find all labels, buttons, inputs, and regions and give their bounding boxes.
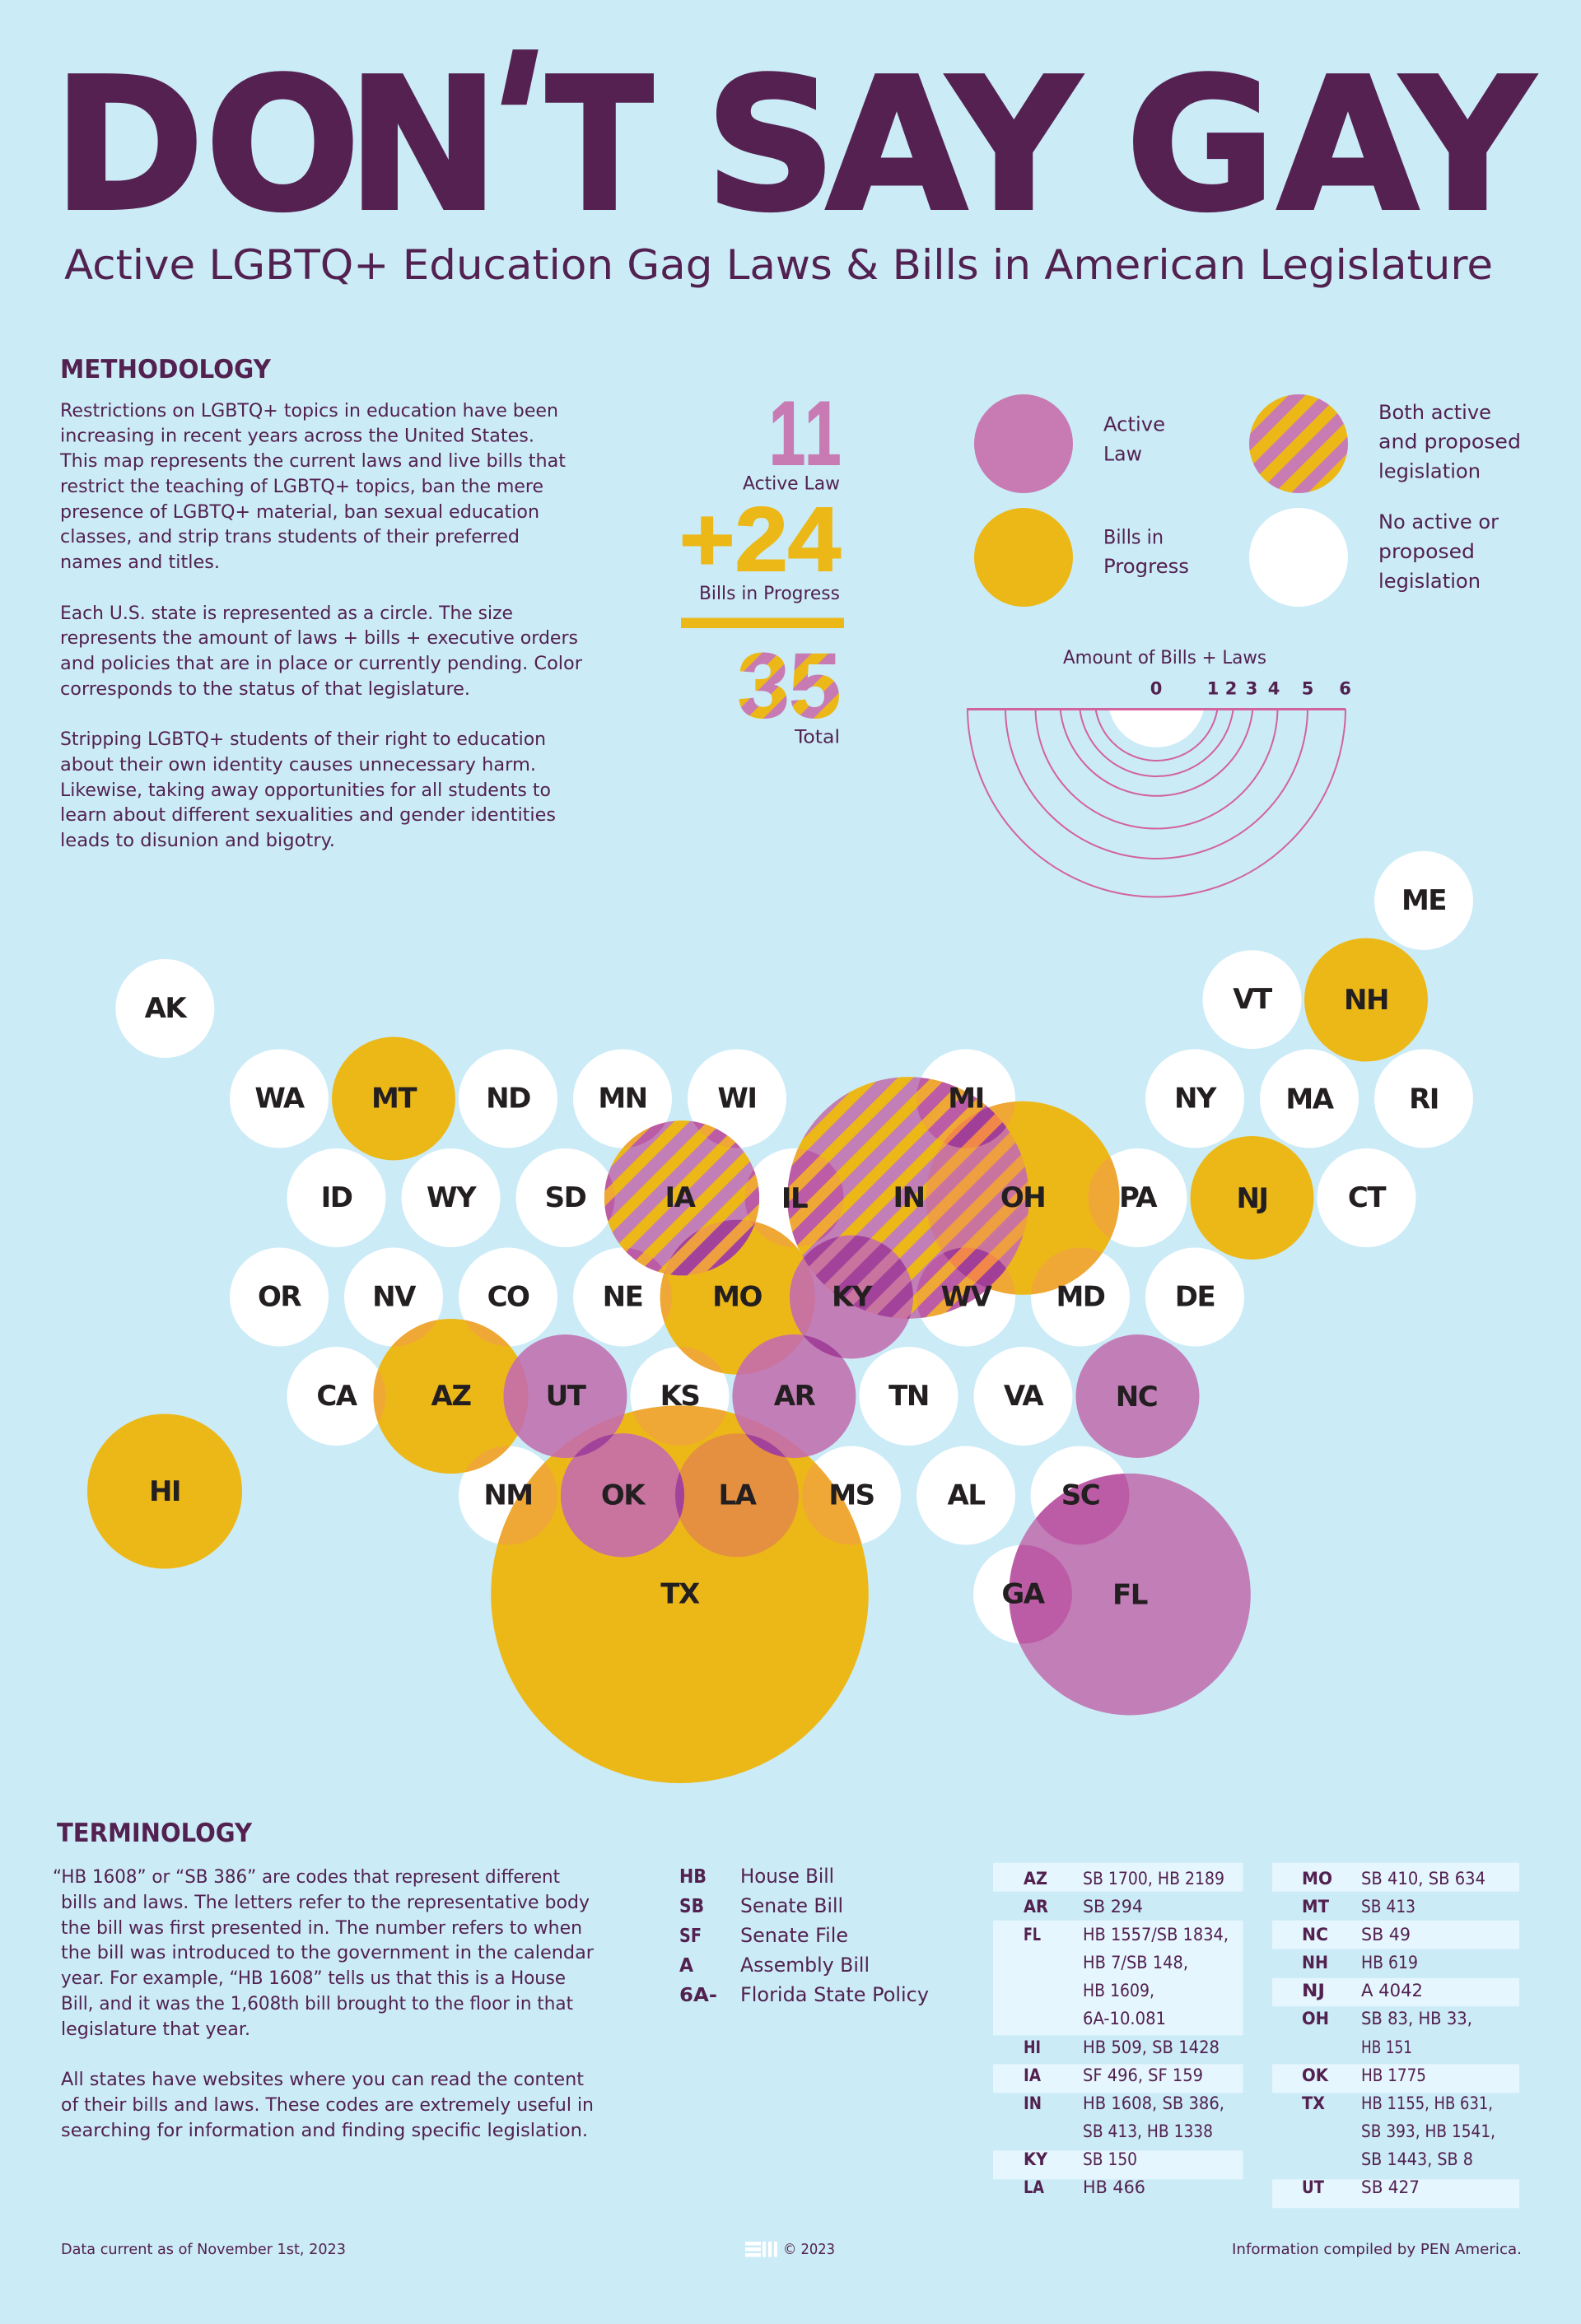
legend: active law: Law bbox=[1103, 442, 1142, 465]
white state circles bbox=[115, 851, 1473, 1644]
size legend: amount of bills + laws: 4 bbox=[1268, 678, 1280, 698]
table: bills by state, AZ to LA: 6A-10.081 bbox=[1083, 2009, 1166, 2028]
size legend: amount of bills + laws: 3 bbox=[1246, 678, 1257, 698]
legend: active law bbox=[974, 394, 1165, 493]
text block: methodology: Stripping LGBTQ+ students of their right to education bbox=[60, 729, 546, 750]
table: bills by state, AZ to LA: FL bbox=[1024, 1925, 1041, 1945]
state labels: ME bbox=[1401, 884, 1446, 917]
text block: methodology: names and titles. bbox=[60, 552, 220, 573]
table: bills by state, MO to UT: HB 1155, HB 631, bbox=[1361, 2093, 1493, 2113]
table: bills by state, MO to UT: MT bbox=[1302, 1897, 1329, 1917]
state labels: ND bbox=[486, 1082, 530, 1115]
table: bills by state, AZ to LA: HB 7/SB 148, bbox=[1083, 1953, 1188, 1972]
stat: 11 active law bbox=[743, 383, 841, 494]
size legend: amount of bills + laws: Amount of Bills + Laws bbox=[1063, 648, 1266, 668]
title: ' bbox=[456, 12, 562, 236]
text block: methodology: leads to disunion and bigotry. bbox=[60, 830, 335, 851]
state labels: ID bbox=[321, 1181, 352, 1214]
state labels: GA bbox=[1001, 1577, 1046, 1610]
table: bills by state, MO to UT: NJ bbox=[1302, 1981, 1325, 2001]
legend: no legislation: No active or bbox=[1378, 510, 1499, 533]
state labels: LA bbox=[719, 1479, 758, 1511]
legend: bills in progress: Bills in bbox=[1103, 525, 1164, 548]
footer: data date: Data current as of November 1st, 2023 bbox=[61, 2242, 346, 2258]
glossary of bill codes: Assembly Bill bbox=[740, 1954, 870, 1977]
state labels: VA bbox=[1004, 1380, 1044, 1413]
table: bills by state, MO to UT: OH bbox=[1302, 2009, 1329, 2029]
state labels: IL bbox=[781, 1182, 808, 1215]
text block: methodology: restrict the teaching of LGBTQ+ topics, ban the mere bbox=[60, 476, 543, 497]
table: bills by state, AZ to LA: SB 413, HB 1338 bbox=[1083, 2121, 1213, 2141]
title: DON bbox=[53, 40, 500, 252]
title: SAY bbox=[705, 40, 1082, 252]
divider bar bbox=[681, 617, 844, 628]
table: bills by state, AZ to LA: SB 150 bbox=[1083, 2149, 1137, 2169]
glossary of bill codes: Senate Bill bbox=[740, 1894, 843, 1917]
state labels: MO bbox=[712, 1281, 762, 1314]
table: bills by state, MO to UT: SB 427 bbox=[1361, 2177, 1420, 2197]
map: state circles bbox=[87, 851, 1473, 1783]
state labels: MA bbox=[1285, 1083, 1335, 1116]
table: bills by state, AZ to LA: AR bbox=[1024, 1897, 1048, 1917]
state labels: SC bbox=[1061, 1479, 1099, 1511]
legend: no legislation: legislation bbox=[1378, 570, 1481, 593]
text block: methodology: presence of LGBTQ+ material, ban sexual education bbox=[60, 501, 539, 523]
stat: 11 active law: Active Law bbox=[743, 473, 840, 494]
title: T bbox=[546, 39, 653, 252]
state labels: SD bbox=[545, 1181, 586, 1214]
size legend: amount of bills + laws: 1 bbox=[1207, 678, 1219, 698]
heading: methodology: METHODOLOGY bbox=[60, 355, 272, 384]
table: bills by state, AZ to LA: HB 1608, SB 386, bbox=[1083, 2093, 1224, 2113]
state labels: NE bbox=[603, 1281, 642, 1314]
state labels: OK bbox=[601, 1479, 646, 1511]
table: bills by state, MO to UT: SB 410, SB 634 bbox=[1361, 1869, 1485, 1889]
subtitle: Active LGBTQ+ Education Gag Laws & Bills in American Legislature bbox=[64, 241, 1493, 289]
table: bills by state, MO to UT: SB 49 bbox=[1361, 1925, 1411, 1944]
table: bills by state, AZ to LA: HB 1609, bbox=[1083, 1981, 1154, 2000]
text block: terminology: of their bills and laws. These codes are extremely useful in bbox=[61, 2094, 594, 2116]
state labels: CA bbox=[316, 1380, 358, 1413]
legend: bills in progress bbox=[974, 508, 1189, 607]
text block: terminology: Bill, and it was the 1,608th bill brought to the floor in that bbox=[61, 1993, 573, 2014]
state labels: WA bbox=[254, 1082, 305, 1115]
table: bills by state, AZ to LA: SB 1700, HB 2189 bbox=[1083, 1869, 1224, 1889]
text block: methodology: represents the amount of laws + bills + executive orders bbox=[60, 627, 578, 649]
glossary of bill codes: Florida State Policy bbox=[740, 1983, 929, 2006]
table: bills by state, MO to UT: SB 1443, SB 8 bbox=[1361, 2149, 1473, 2169]
stat: 11 active law: 11 bbox=[769, 383, 841, 484]
state labels: PA bbox=[1119, 1181, 1158, 1214]
text block: terminology: year. For example, “HB 1608” tells us that this is a House bbox=[61, 1968, 566, 1989]
state labels: CO bbox=[487, 1281, 529, 1314]
table: bills by state, MO to UT: OK bbox=[1302, 2066, 1329, 2086]
footer: logo and copyright bbox=[745, 2242, 835, 2258]
size legend: amount of bills + laws: 5 bbox=[1302, 678, 1313, 698]
size legend: amount of bills + laws: 2 bbox=[1225, 678, 1237, 698]
text block: methodology: classes, and strip trans students of their preferred bbox=[60, 526, 520, 547]
text block: terminology bbox=[53, 1866, 595, 2141]
glossary of bill codes: Senate File bbox=[740, 1924, 848, 1947]
text block: methodology: Likewise, taking away opportunities for all students to bbox=[60, 780, 551, 801]
text block: methodology: and policies that are in place or currently pending. Color bbox=[60, 653, 583, 674]
glossary of bill codes: A bbox=[679, 1955, 693, 1977]
state labels: OR bbox=[258, 1281, 301, 1314]
table: bills by state, MO to UT: HB 1775 bbox=[1361, 2066, 1426, 2085]
text block: methodology: learn about different sexualities and gender identities bbox=[60, 804, 556, 826]
text block: terminology: All states have websites where you can read the content bbox=[61, 2069, 584, 2090]
state labels: FL bbox=[1112, 1579, 1148, 1612]
table: bills by state, AZ to LA bbox=[993, 1863, 1243, 2198]
text block: methodology bbox=[59, 400, 583, 851]
table: bills by state, MO to UT: UT bbox=[1302, 2177, 1324, 2198]
state labels: AK bbox=[145, 992, 188, 1025]
state labels: MT bbox=[371, 1082, 417, 1115]
text block: methodology: This map represents the current laws and live bills that bbox=[59, 450, 566, 472]
glossary of bill codes: House Bill bbox=[740, 1865, 834, 1888]
legend: bills in progress: Progress bbox=[1103, 555, 1189, 578]
state labels: VT bbox=[1233, 983, 1273, 1016]
glossary of bill codes bbox=[679, 1865, 929, 2006]
state labels: RI bbox=[1409, 1083, 1439, 1116]
size legend: amount of bills + laws: 0 bbox=[1150, 678, 1162, 698]
table: bills by state, AZ to LA: SF 496, SF 159 bbox=[1083, 2066, 1203, 2085]
table: bills by state, AZ to LA: HI bbox=[1024, 2038, 1041, 2058]
state labels: AZ bbox=[431, 1380, 471, 1413]
glossary of bill codes: HB bbox=[679, 1866, 707, 1888]
title bbox=[53, 12, 1536, 252]
state labels: NC bbox=[1116, 1381, 1157, 1413]
coloured state circles bbox=[87, 938, 1428, 1783]
table: bills by state, MO to UT: SB 413 bbox=[1361, 1897, 1415, 1916]
text block: methodology: Each U.S. state is represented as a circle. The size bbox=[60, 603, 513, 624]
glossary of bill codes: SB bbox=[679, 1896, 704, 1917]
state labels: WI bbox=[717, 1082, 757, 1115]
stat: +24 bills in progress: +24 bbox=[679, 489, 841, 590]
size legend: amount of bills + laws: 6 bbox=[1339, 678, 1351, 698]
table: bills by state, AZ to LA: LA bbox=[1024, 2177, 1044, 2198]
state labels: KY bbox=[832, 1281, 873, 1314]
state labels: MS bbox=[828, 1479, 874, 1511]
stat: 35 total: Total bbox=[794, 728, 840, 747]
state labels: TX bbox=[660, 1577, 700, 1610]
table: bills by state, MO to UT: HB 619 bbox=[1361, 1953, 1418, 1972]
table: bills by state, MO to UT: NC bbox=[1302, 1925, 1328, 1945]
text block: terminology: bills and laws. The letters refer to the representative body bbox=[61, 1892, 590, 1913]
table: bills by state, AZ to LA: IN bbox=[1024, 2093, 1042, 2114]
table: bills by state, MO to UT: TX bbox=[1302, 2093, 1325, 2114]
table: bills by state, MO to UT: NH bbox=[1302, 1953, 1328, 1973]
table: bills by state, MO to UT: SB 393, HB 1541, bbox=[1361, 2121, 1495, 2141]
size legend: amount of bills + laws bbox=[967, 650, 1350, 897]
state labels: NY bbox=[1174, 1082, 1217, 1115]
legend: no legislation: proposed bbox=[1378, 540, 1475, 563]
state labels: TN bbox=[888, 1380, 929, 1413]
state labels: UT bbox=[546, 1380, 587, 1413]
legend: both active and proposed: legislation bbox=[1378, 459, 1481, 482]
table: bills by state, AZ to LA: KY bbox=[1024, 2149, 1047, 2170]
table: bills by state, AZ to LA: SB 294 bbox=[1083, 1897, 1143, 1916]
table: bills by state, AZ to LA: HB 509, SB 1428 bbox=[1083, 2038, 1220, 2057]
state labels: NH bbox=[1344, 984, 1388, 1017]
state labels: OH bbox=[1000, 1181, 1045, 1214]
state labels: IN bbox=[893, 1181, 925, 1214]
state labels: DE bbox=[1175, 1281, 1215, 1314]
legend: both active and proposed bbox=[1249, 394, 1521, 493]
text block: terminology: legislature that year. bbox=[61, 2019, 250, 2040]
table: bills by state, AZ to LA: HB 466 bbox=[1083, 2177, 1145, 2197]
text block: methodology: Restrictions on LGBTQ+ topics in education have been bbox=[60, 400, 558, 421]
table: bills by state, MO to UT: A 4042 bbox=[1361, 1981, 1423, 2000]
state labels: IA bbox=[665, 1181, 697, 1214]
text block: terminology: the bill was first presented in. The number refers to when bbox=[61, 1917, 582, 1939]
legend: both active and proposed: Both active bbox=[1378, 401, 1491, 424]
state labels: AR bbox=[774, 1380, 816, 1413]
glossary of bill codes: SF bbox=[679, 1926, 702, 1947]
legend: no legislation bbox=[1249, 508, 1499, 607]
state labels bbox=[145, 884, 1446, 1612]
legend: active law: Active bbox=[1103, 413, 1165, 436]
stat: +24 bills in progress: Bills in Progress bbox=[699, 584, 840, 604]
glossary of bill codes: 6A- bbox=[679, 1985, 717, 2006]
legend: both active and proposed: and proposed bbox=[1378, 431, 1521, 454]
table: bills by state, MO to UT: MO bbox=[1302, 1869, 1332, 1889]
state labels: WV bbox=[941, 1281, 993, 1314]
text block: methodology: increasing in recent years across the United States. bbox=[60, 425, 534, 446]
state labels: CT bbox=[1348, 1181, 1387, 1214]
state labels: HI bbox=[149, 1475, 180, 1508]
state labels: NV bbox=[372, 1281, 417, 1314]
table: bills by state, AZ to LA: IA bbox=[1024, 2066, 1041, 2086]
table: bills by state, AZ to LA: HB 1557/SB 1834, bbox=[1083, 1925, 1229, 1944]
state labels: AL bbox=[948, 1479, 985, 1511]
state labels: KS bbox=[660, 1380, 699, 1413]
text block: terminology: “HB 1608” or “SB 386” are codes that represent different bbox=[53, 1866, 560, 1888]
table: bills by state, MO to UT bbox=[1272, 1863, 1519, 2208]
state labels: NM bbox=[483, 1479, 533, 1511]
text block: terminology: searching for information and finding specific legislation. bbox=[61, 2120, 588, 2141]
text block: terminology: the bill was introduced to the government in the calendar bbox=[61, 1942, 595, 1963]
state labels: MD bbox=[1056, 1281, 1105, 1314]
table: bills by state, AZ to LA: AZ bbox=[1024, 1869, 1047, 1889]
table: bills by state, MO to UT: SB 83, HB 33, bbox=[1361, 2009, 1472, 2028]
footer: logo and copyright: © 2023 bbox=[783, 2242, 835, 2258]
state labels: NJ bbox=[1236, 1182, 1268, 1215]
text block: methodology: corresponds to the status of that legislature. bbox=[60, 678, 470, 700]
text block: methodology: about their own identity causes unnecessary harm. bbox=[60, 754, 536, 775]
state labels: MI bbox=[948, 1082, 984, 1115]
heading: terminology: TERMINOLOGY bbox=[57, 1819, 253, 1848]
table: bills by state, MO to UT: HB 151 bbox=[1361, 2038, 1412, 2057]
state labels: WY bbox=[427, 1181, 477, 1214]
footer: source: Information compiled by PEN America. bbox=[1232, 2242, 1522, 2258]
title: GAY bbox=[1126, 40, 1536, 252]
state labels: MN bbox=[598, 1082, 647, 1115]
stat: 35 total: 35 bbox=[738, 636, 841, 737]
